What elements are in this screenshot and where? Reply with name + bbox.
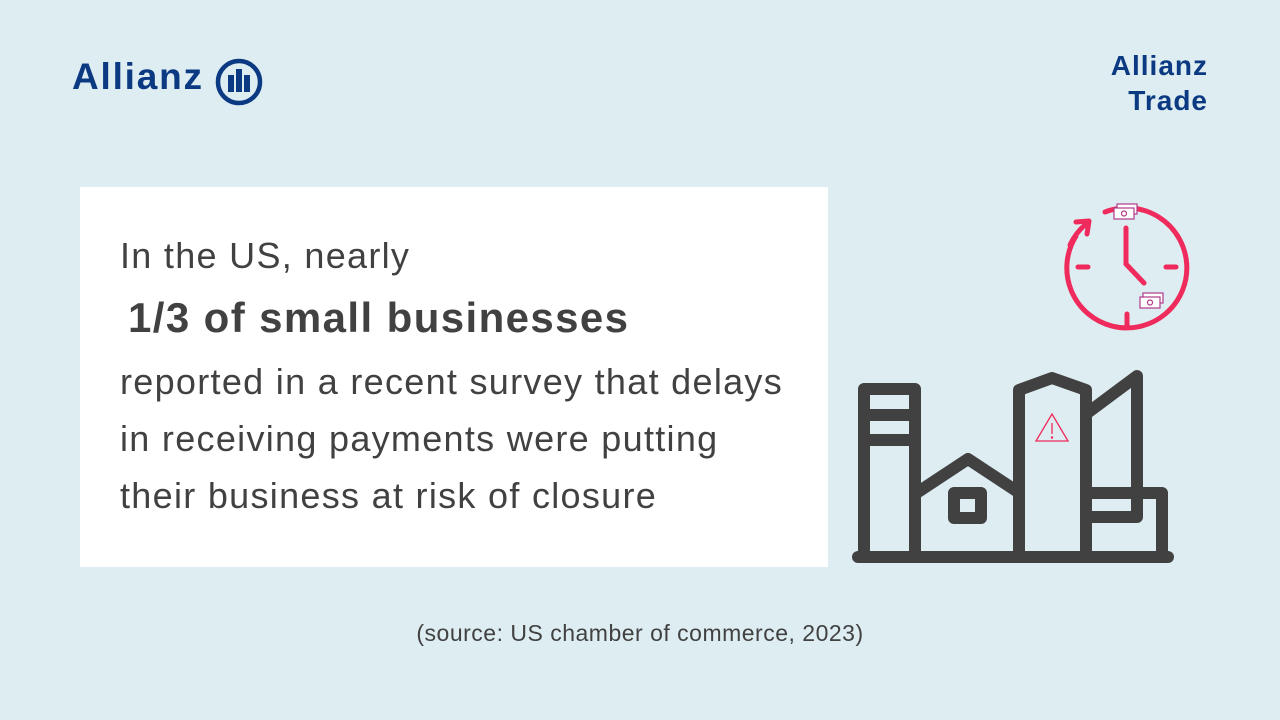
icon: warning [1036,414,1068,441]
text: body [120,361,783,516]
icon: clock with money [1064,203,1190,330]
text: body: their business at risk of closure [120,475,657,516]
icon: buildings [852,370,1174,563]
text: source: (source: US chamber of commerce, 2023) [416,620,864,646]
panel: statement [80,187,828,567]
text: body: reported in a recent survey that delays [120,361,783,402]
text: highlight: 1/3 of small businesses [128,294,629,341]
logo: Allianz Trade: Allianz [1111,50,1208,81]
text: body: in receiving payments were putting [120,418,718,459]
logo: Allianz Trade [1111,50,1208,116]
logo: Allianz Trade: Trade [1128,85,1208,116]
text: intro: In the US, nearly [120,235,410,276]
logo: Allianz [72,56,262,106]
logo: Allianz: Allianz [72,56,204,97]
